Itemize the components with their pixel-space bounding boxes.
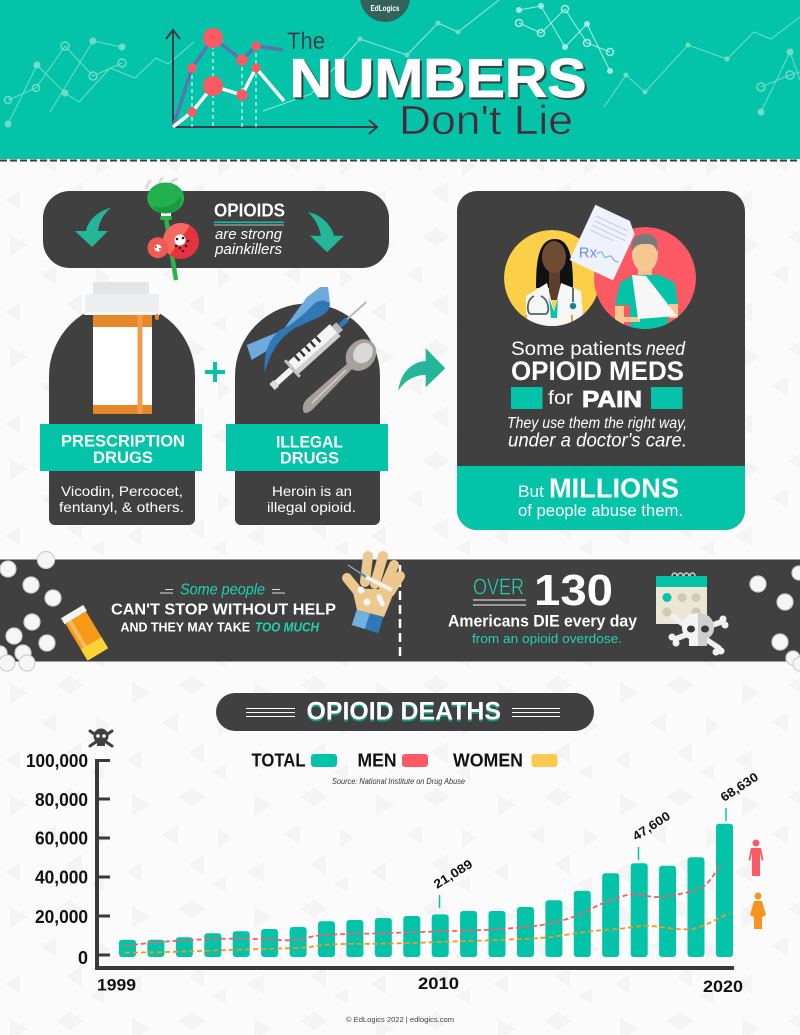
icon: skull and crossbones — [90, 728, 112, 746]
text: some patients need: OPIOID MEDS — [511, 356, 684, 386]
banner: prescription drugs: PRESCRIPTION — [61, 432, 185, 451]
icon: title line chart — [166, 28, 377, 134]
panel: opioids pill — [43, 177, 389, 280]
title: NUMBERS — [292, 49, 588, 111]
text: some people: TOO MUCH — [255, 621, 320, 635]
icon: hand with pills and syringe — [347, 556, 400, 633]
arrow: to patients card — [398, 348, 445, 391]
legend: MEN — [358, 751, 396, 771]
x axis labels: 2010 — [418, 974, 459, 993]
text: prescription examples — [59, 483, 184, 515]
panel: prescription drugs — [40, 282, 202, 525]
heading: opioid deaths — [216, 693, 594, 731]
line: women — [125, 913, 730, 953]
title: The — [287, 28, 325, 55]
text: over 130: Americans DIE every day — [448, 613, 638, 631]
arrow: right curved down — [308, 212, 344, 252]
text: over 130: 130 — [534, 566, 613, 615]
text: but millions: But — [518, 482, 544, 501]
banner: illegal drugs: ILLEGAL — [276, 432, 343, 451]
text: some people: Some people — [180, 581, 265, 598]
x axis labels: 2020 — [703, 977, 743, 996]
text: over 130: OVER — [473, 573, 524, 599]
arrow: left curved down — [75, 208, 111, 247]
text: some patients need: need — [646, 338, 686, 360]
text: heroin note: illegal opioid. — [267, 499, 356, 515]
callout: 21,089 — [431, 857, 475, 908]
x axis labels: 1999 — [97, 976, 136, 994]
panel: patients card — [457, 191, 745, 530]
y axis labels: 80,000 — [35, 790, 88, 810]
source note: Source: National Institute on Drug Abuse — [332, 777, 465, 786]
icon: man — [748, 840, 764, 876]
chart: opioid deaths — [26, 751, 766, 996]
text: opioids are strong painkillers: OPIOIDS — [214, 200, 285, 220]
heading: opioid deaths: OPIOID DEATHS — [306, 697, 501, 725]
text: heroin note: Heroin is an — [272, 483, 352, 499]
callout: 68,630: 68,630 — [718, 770, 761, 805]
heading: opioid deaths: OPIOID DEATHS — [306, 700, 501, 728]
footer: © EdLogics 2022 | edlogics.com — [346, 1015, 454, 1024]
icon: doctor — [504, 230, 600, 330]
text: some patients need: under a doctor's care. — [508, 431, 687, 452]
bars: total — [119, 824, 733, 957]
text: heroin note — [267, 483, 356, 515]
badge: EdLogics logo: EdLogics — [370, 4, 400, 13]
text: some people: AND THEY MAY TAKE — [120, 621, 250, 635]
text: opioids are strong painkillers — [214, 200, 285, 258]
text: some patients need: PAIN — [582, 386, 642, 412]
text: opioids are strong painkillers: are strong — [215, 226, 283, 243]
banner: prescription drugs: DRUGS — [93, 448, 153, 467]
text: some patients need — [507, 338, 687, 452]
text: over 130 — [448, 566, 638, 646]
text: some people — [111, 581, 336, 635]
title: Don't Lie — [399, 97, 573, 143]
text: prescription examples: Vicodin, Percocet, — [61, 483, 183, 499]
text: some people: CAN'T STOP WITHOUT HELP — [111, 601, 336, 618]
icon: patient with sling — [594, 227, 696, 330]
y axis labels: 0 — [78, 948, 88, 968]
panel: illegal drugs — [226, 287, 388, 525]
y axis labels: 40,000 — [35, 868, 88, 888]
icon: pill bottle — [84, 282, 160, 414]
callout: 21,089: 21,089 — [431, 857, 475, 892]
icon: prescription paper — [570, 205, 639, 280]
line: men — [125, 864, 723, 946]
icon: poppy — [146, 177, 199, 280]
y axis labels: 20,000 — [35, 907, 88, 927]
legend: TOTAL — [252, 751, 306, 771]
title: NUMBERS — [290, 47, 586, 109]
legend — [252, 751, 558, 771]
badge: EdLogics logo — [360, 0, 410, 22]
icon: spilled pill bottle — [61, 605, 109, 661]
icon: syringe — [265, 294, 374, 395]
y axis labels: 100,000 — [26, 751, 88, 771]
banner: illegal drugs — [226, 424, 388, 471]
text: over 130: from an opioid overdose. — [472, 631, 622, 646]
icon: scattered pills right — [750, 566, 800, 671]
y axis labels: 60,000 — [35, 828, 88, 848]
icon: prescription paper: Rx — [579, 245, 598, 262]
callout: 68,630 — [718, 770, 761, 821]
header panel — [0, 0, 800, 160]
icon: scattered pills left — [0, 552, 61, 671]
text: but millions — [518, 472, 683, 520]
text: some patients need: They use them the right way, — [507, 415, 687, 432]
text: but millions: MILLIONS — [549, 472, 679, 504]
text: but millions: of people abuse them. — [518, 501, 683, 520]
legend: WOMEN — [453, 751, 523, 771]
banner: prescription drugs — [40, 424, 202, 471]
text: some patients need: Some patients — [511, 338, 642, 360]
text: opioids are strong painkillers: painkillers — [214, 241, 282, 258]
icon: plus — [205, 362, 225, 382]
callout: 47,600 — [630, 809, 673, 860]
icon: calendar with skull — [656, 573, 728, 656]
title — [287, 28, 588, 143]
icon: spoon — [303, 333, 383, 413]
icon: tourniquet ribbon — [247, 287, 330, 373]
y axis labels — [26, 751, 88, 968]
banner: illegal drugs: DRUGS — [280, 449, 339, 468]
panel: dark band — [0, 552, 800, 671]
text: prescription examples: fentanyl, & others. — [59, 499, 184, 515]
x axis labels — [97, 974, 743, 996]
background line charts — [4, 0, 800, 128]
text: some patients need: for — [548, 388, 574, 409]
axes — [95, 759, 734, 970]
callout: 47,600: 47,600 — [630, 809, 673, 844]
icon: woman — [750, 892, 766, 929]
